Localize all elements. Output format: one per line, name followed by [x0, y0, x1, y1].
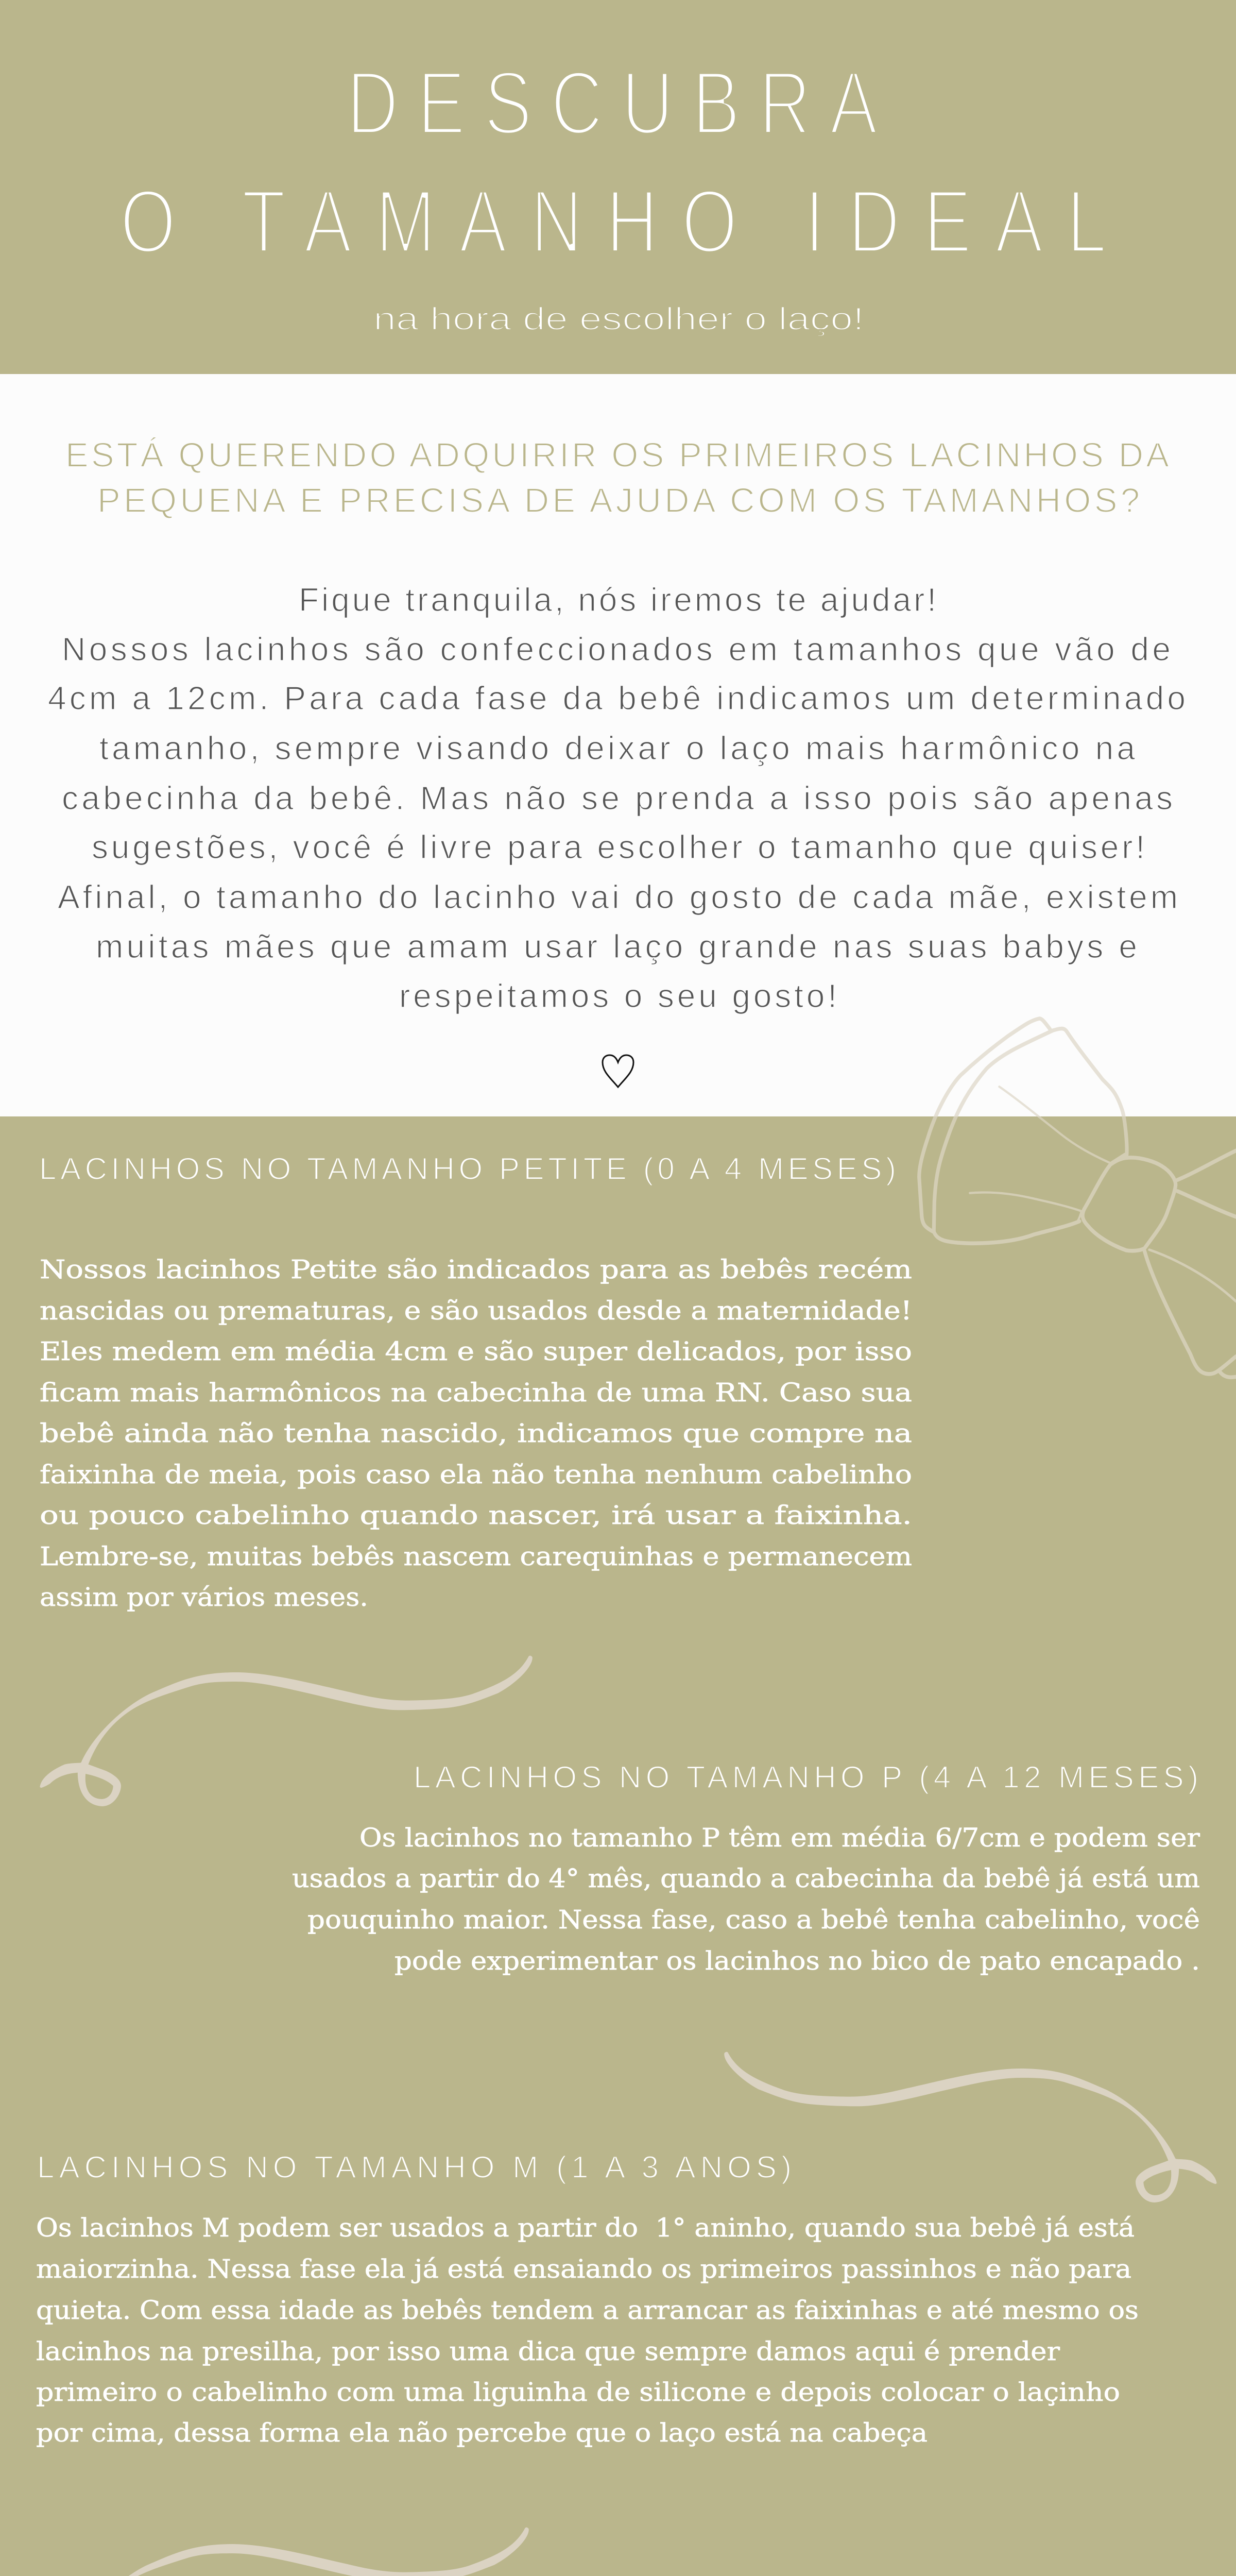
text: petite description: Lembre-se, muitas bebês nascem carequinhas e permanecem	[40, 1541, 912, 1571]
text: M description	[36, 2213, 1139, 2448]
text: P description	[292, 1823, 1200, 1976]
text: petite description: Nossos lacinhos Petite são indicados para as bebês recém	[40, 1255, 912, 1284]
intro paragraph: muitas mães que amam usar laço grande nas suas babys e	[96, 928, 1137, 965]
intro paragraph	[48, 581, 1186, 1014]
section: tamanho P	[292, 1760, 1200, 1976]
text: P description: Os lacinhos no tamanho P têm em média 6/7cm e podem ser	[359, 1823, 1200, 1853]
swirl 1	[40, 1656, 533, 1806]
section: tamanho M	[36, 2150, 1139, 2448]
heading: petite: LACINHOS NO TAMANHO PETITE (0 A 4 MESES)	[39, 1151, 896, 1186]
intro paragraph: Nossos lacinhos são confeccionados em tamanhos que vão de	[62, 631, 1171, 668]
icon: bow illustration	[919, 1019, 1236, 1377]
question heading: PEQUENA E PRECISA DE AJUDA COM OS TAMANHOS?	[97, 481, 1140, 520]
title: DESCUBRA	[347, 53, 878, 154]
heading: P: LACINHOS NO TAMANHO P (4 A 12 MESES)	[414, 1760, 1198, 1794]
text: petite description: ficam mais harmônicos na cabecinha de uma RN. Caso sua	[40, 1378, 912, 1408]
text: petite description: nascidas ou prematuras, e são usados desde a maternidade!	[40, 1296, 912, 1326]
text: petite description: assim por vários meses.	[40, 1582, 368, 1612]
intro paragraph: cabecinha da bebê. Mas não se prenda a isso pois são apenas	[62, 779, 1173, 817]
panel: introduction	[0, 374, 1236, 1116]
text: P description: pouquinho maior. Nessa fase, caso a bebê tenha cabelinho, você	[307, 1905, 1200, 1935]
text: M description: Os lacinhos M podem ser usados a partir do 1° aninho, quando sua bebê já está	[36, 2213, 1135, 2243]
title	[120, 53, 1107, 272]
panel: sizes background	[0, 1116, 1236, 2576]
text: P description: usados a partir do 4° mês, quando a cabecinha da bebê já está um	[292, 1863, 1200, 1893]
subtitle: na hora de escolher o laço!	[373, 301, 864, 337]
question heading	[65, 436, 1169, 520]
text: petite description: ou pouco cabelinho quando nascer, irá usar a faixinha.	[40, 1500, 912, 1530]
text: petite description: Eles medem em média 4cm e são super delicados, por isso	[40, 1336, 912, 1366]
text: M description: por cima, dessa forma ela não percebe que o laço está na cabeça	[36, 2418, 928, 2448]
text: petite description	[40, 1255, 912, 1612]
icon: heart	[603, 1055, 633, 1087]
text: P description: pode experimentar os lacinhos no bico de pato encapado .	[394, 1946, 1200, 1976]
intro paragraph: 4cm a 12cm. Para cada fase da bebê indicamos um determinado	[48, 680, 1186, 717]
section: tamanho petite	[39, 1151, 912, 1612]
question heading: ESTÁ QUERENDO ADQUIRIR OS PRIMEIROS LACINHOS DA	[65, 436, 1169, 474]
heading: M: LACINHOS NO TAMANHO M (1 A 3 ANOS)	[37, 2150, 792, 2184]
intro paragraph: sugestões, você é livre para escolher o tamanho que quiser!	[92, 828, 1145, 866]
text: M description: lacinhos na presilha, por isso uma dica que sempre damos aqui é prender	[36, 2336, 1060, 2366]
text: petite description: bebê ainda não tenha nascido, indicamos que compre na	[40, 1418, 912, 1448]
swirl 3	[36, 2528, 529, 2576]
text: M description: maiorzinha. Nessa fase ela já está ensaiando os primeiros passinhos e não para	[36, 2254, 1131, 2284]
swirl 2	[724, 2052, 1217, 2202]
text: M description: quieta. Com essa idade as bebês tendem a arrancar as faixinhas e até mesmo os	[36, 2295, 1139, 2325]
intro paragraph: Afinal, o tamanho do lacinho vai do gosto de cada mãe, existem	[58, 878, 1178, 916]
title: O TAMANHO IDEAL	[120, 171, 1107, 272]
text: petite description: faixinha de meia, pois caso ela não tenha nenhum cabelinho	[40, 1460, 912, 1489]
panel: header	[0, 0, 1236, 374]
text: M description: primeiro o cabelinho com uma liguinha de silicone e depois colocar o laçinho	[36, 2377, 1120, 2407]
intro paragraph: tamanho, sempre visando deixar o laço mais harmônico na	[99, 730, 1135, 767]
intro paragraph: Fique tranquila, nós iremos te ajudar!	[299, 581, 936, 618]
intro paragraph: respeitamos o seu gosto!	[399, 977, 837, 1014]
